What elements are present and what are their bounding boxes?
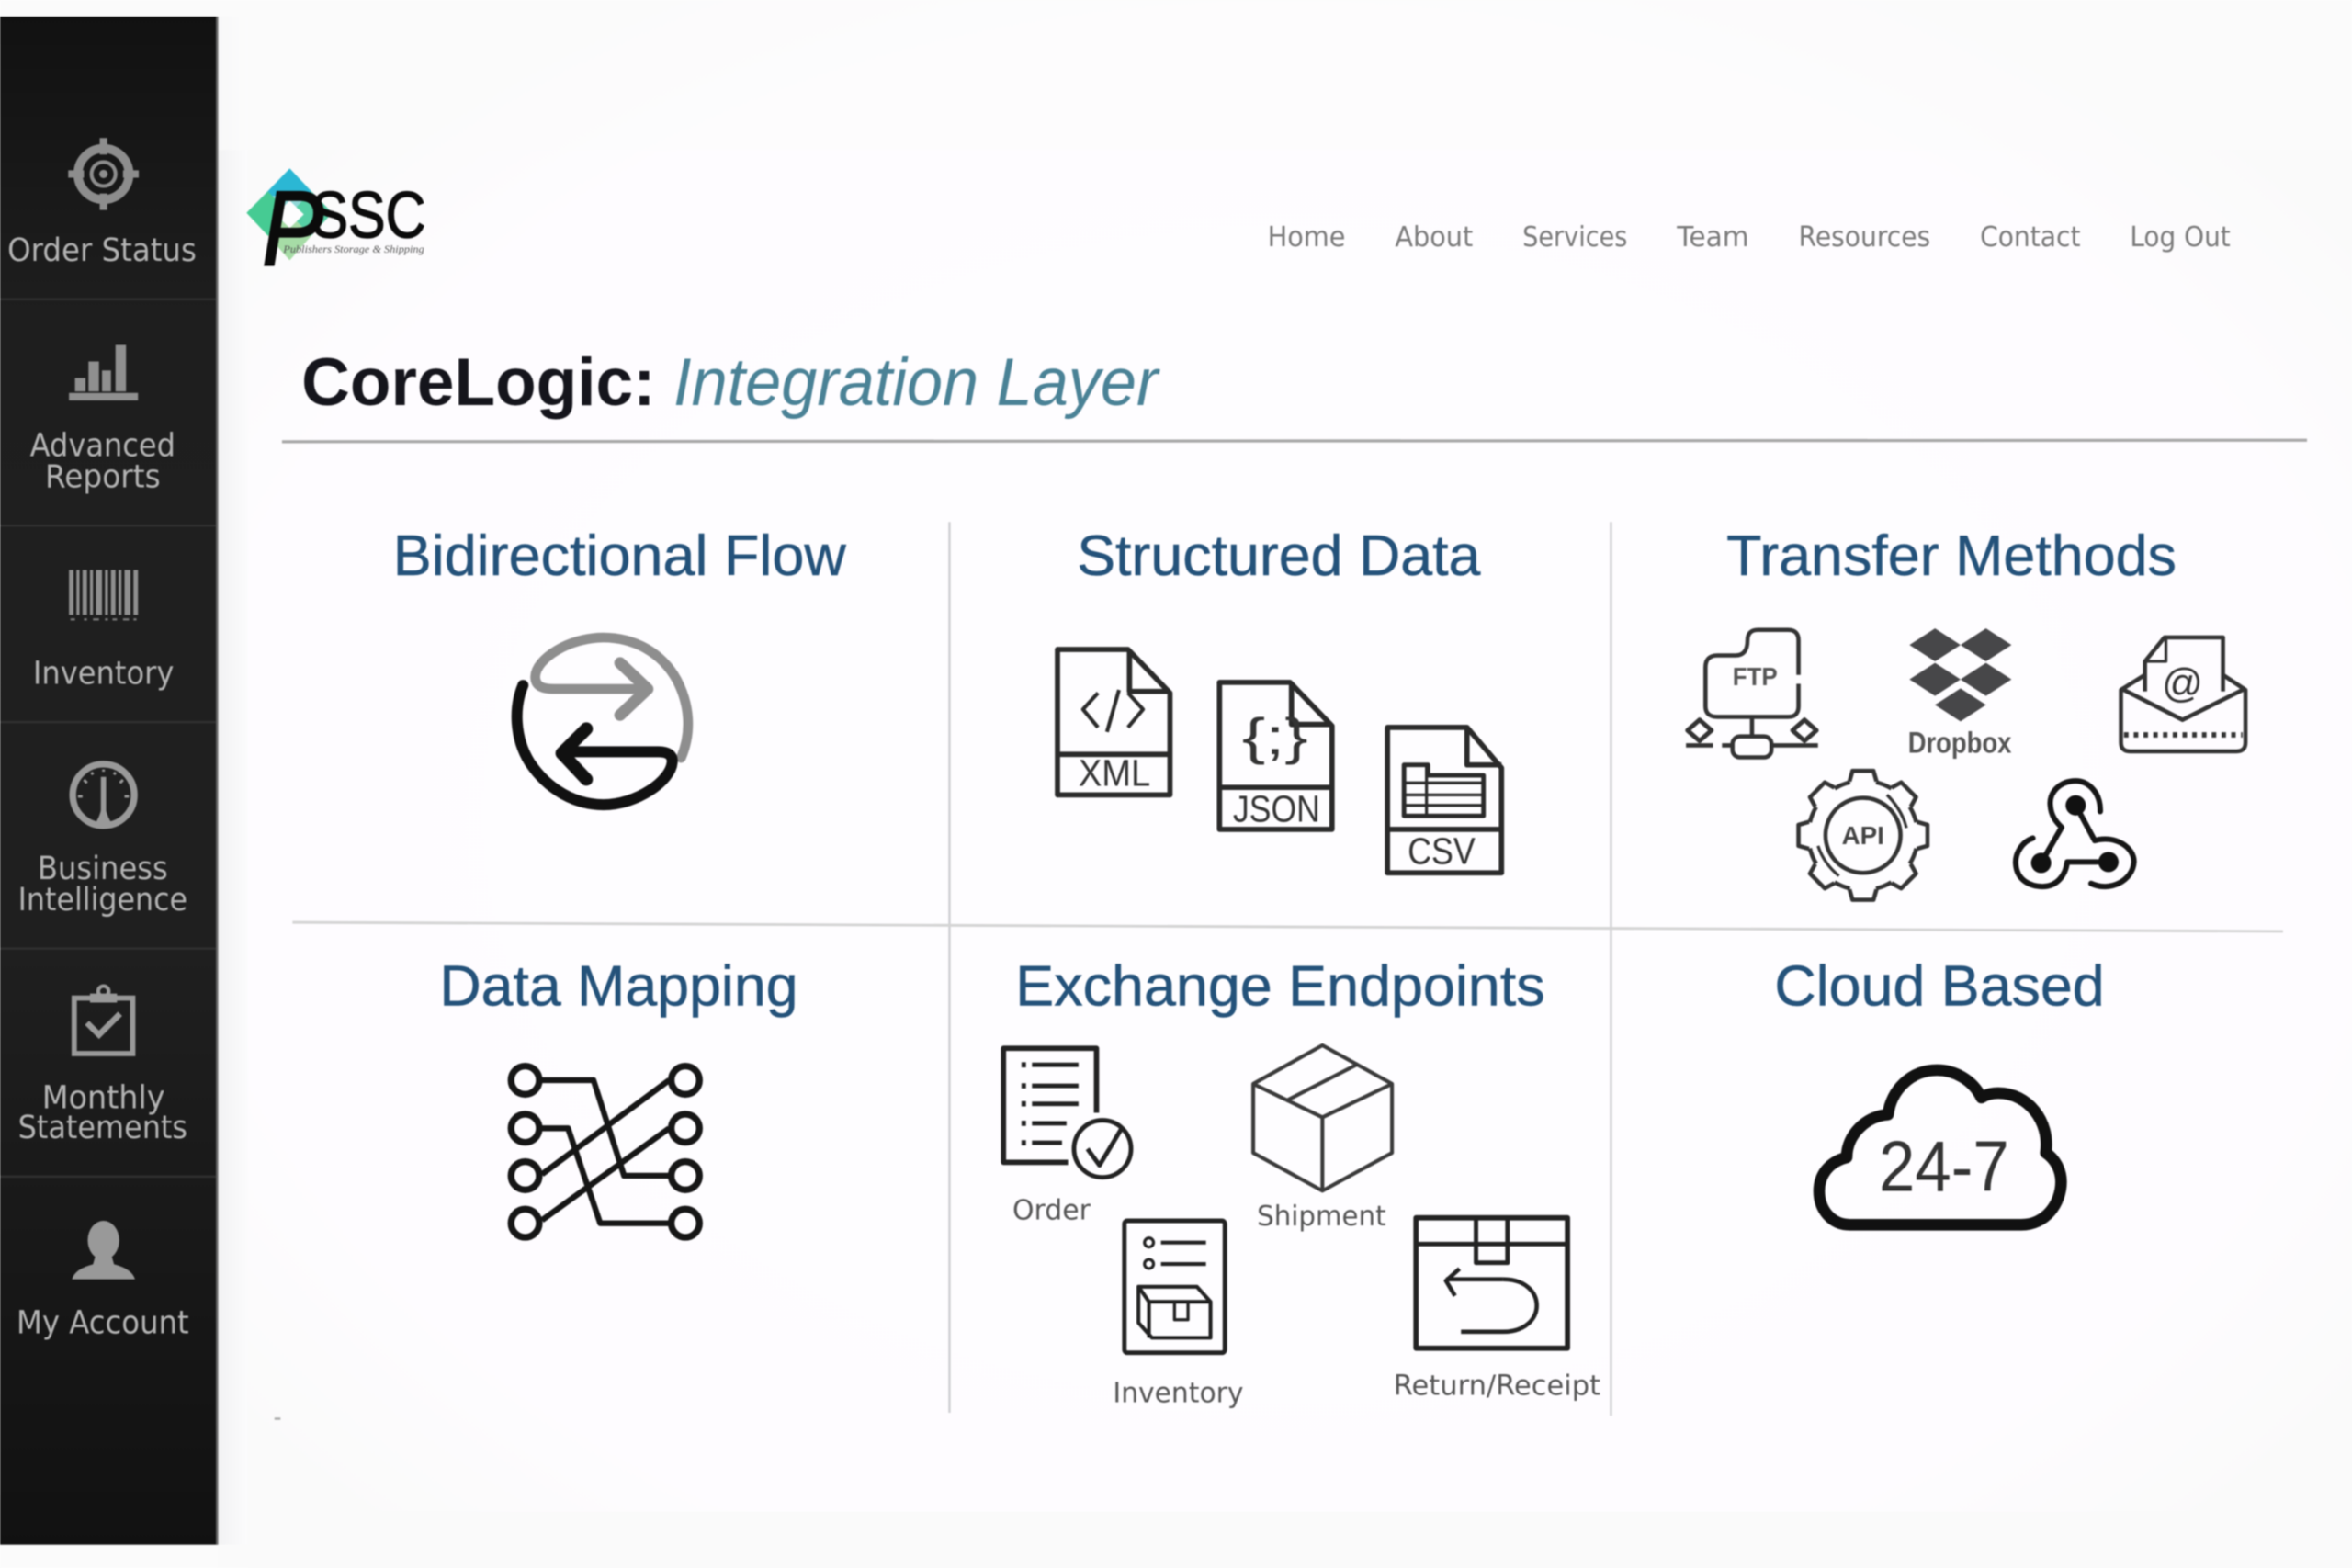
icon: API gear <box>1799 771 1928 900</box>
icon: my account person <box>72 1221 135 1280</box>
top navigation: Home <box>1268 221 1345 254</box>
panel: Transfer Methods <box>1686 525 2245 900</box>
icon: advanced reports bars <box>69 345 138 400</box>
icon: bidirectional arrows <box>517 637 688 805</box>
top navigation: Team <box>1676 221 1749 254</box>
heading: Structured Data: Structured Data <box>1077 525 1481 588</box>
label: Monthly Statements: Monthly <box>42 1079 165 1117</box>
icon: XML file <box>1057 649 1170 795</box>
icon: email envelope: @ <box>2162 661 2203 706</box>
label: Business Intelligence <box>18 850 187 919</box>
logo: PSSC: SSC <box>311 178 425 252</box>
icon: data mapping crossed links <box>511 1066 699 1237</box>
title: Integration Layer <box>673 344 1160 420</box>
icon: shipment box <box>1253 1045 1392 1190</box>
icon: inventory barcode <box>69 570 138 619</box>
icon: monthly statements clipboard <box>74 987 132 1054</box>
logo: PSSC: P <box>262 170 323 288</box>
icon: inventory sheet with box <box>1125 1221 1225 1353</box>
label: Advanced Reports: Reports <box>45 458 161 496</box>
heading: Cloud Based: Cloud Based <box>1774 955 2105 1019</box>
panel: Exchange Endpoints <box>1003 955 1600 1410</box>
icon: email envelope <box>2121 637 2245 751</box>
heading: Data Mapping: Data Mapping <box>439 955 798 1019</box>
label: Monthly Statements: Statements <box>18 1109 187 1146</box>
top navigation: Resources <box>1799 221 1930 254</box>
title <box>301 344 1160 420</box>
icon: order status target <box>68 138 139 210</box>
label: Business Intelligence: Business <box>38 850 168 887</box>
panel: Data Mapping <box>439 955 798 1237</box>
label: Business Intelligence: Intelligence <box>18 881 187 919</box>
icon: Dropbox <box>1908 628 2011 760</box>
top navigation <box>1268 221 2231 254</box>
top navigation: Contact <box>1980 221 2081 254</box>
panel: Cloud Based <box>1774 955 2105 1224</box>
label: Advanced Reports <box>30 426 175 496</box>
icon: JSON file <box>1219 682 1332 830</box>
panel: Bidirectional Flow <box>393 525 846 805</box>
icon: CSV file <box>1387 728 1501 873</box>
heading: Exchange Endpoints: Exchange Endpoints <box>1015 955 1545 1019</box>
icon: order checklist <box>1003 1048 1131 1178</box>
icon: FTP folder: FTP <box>1733 662 1778 691</box>
label: Inventory: Inventory <box>1113 1378 1243 1410</box>
icon: business intelligence gauge <box>73 764 134 827</box>
top navigation: Log Out <box>2130 221 2231 254</box>
icon: FTP folder <box>1686 630 1818 758</box>
icon: webhook <box>2016 781 2134 886</box>
panel: sidebar navigation <box>0 17 219 1545</box>
icon: CSV file: CSV <box>1408 829 1476 872</box>
icon: return box <box>1416 1218 1567 1348</box>
label: My Account: My Account <box>17 1303 189 1341</box>
label: Monthly Statements <box>18 1079 187 1146</box>
icon: API gear: API <box>1842 821 1884 850</box>
panel: Structured Data <box>1057 525 1501 873</box>
icon: JSON file: {;} <box>1242 708 1308 765</box>
heading: Bidirectional Flow: Bidirectional Flow <box>393 525 846 588</box>
label: Inventory: Inventory <box>33 655 174 693</box>
icon: XML file: XML <box>1079 752 1150 795</box>
logo: PSSC: Publishers Storage & Shipping <box>282 243 424 255</box>
icon: JSON file: JSON <box>1233 788 1320 830</box>
icon: Dropbox: Dropbox <box>1908 726 2011 760</box>
label: Order Status: Order Status <box>7 231 197 269</box>
icon: 24-7 cloud: 24-7 <box>1879 1126 2009 1207</box>
heading: Transfer Methods: Transfer Methods <box>1726 525 2177 588</box>
top navigation: About <box>1395 221 1473 254</box>
label: Return/Receipt: Return/Receipt <box>1394 1370 1600 1402</box>
title: CoreLogic: <box>301 344 655 420</box>
label: Shipment: Shipment <box>1257 1201 1386 1233</box>
top navigation: Services <box>1522 221 1627 254</box>
icon: 24-7 cloud <box>1819 1070 2061 1224</box>
label: Advanced Reports: Advanced <box>30 426 175 464</box>
label: Order: Order <box>1012 1194 1091 1226</box>
logo: PSSC <box>246 168 425 288</box>
